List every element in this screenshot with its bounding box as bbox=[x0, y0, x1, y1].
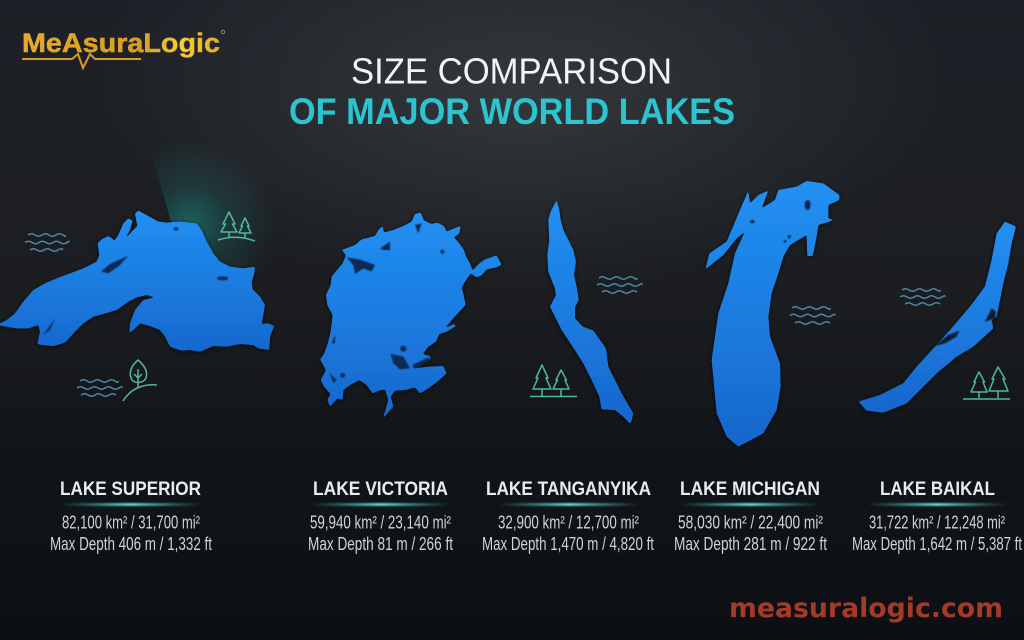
label: Lake Victoria: LAKE VICTORIA bbox=[313, 479, 448, 500]
label: Lake Victoria: 59,940 km² / 23,140 mi² bbox=[310, 512, 451, 532]
logo bbox=[22, 28, 225, 68]
icon: waves near Michigan bbox=[790, 307, 835, 324]
label: Lake Superior: 82,100 km² / 31,700 mi² bbox=[62, 512, 200, 532]
label: Lake Superior: Max Depth 406 m / 1,332 ft bbox=[50, 534, 212, 554]
label: Lake Tanganyika: 32,900 km² / 12,700 mi² bbox=[498, 512, 639, 532]
glow behind Lake Superior bbox=[150, 130, 290, 310]
label: Lake Tanganyika: Max Depth 1,470 m / 4,820 ft bbox=[482, 534, 654, 554]
label: Lake Tanganyika: LAKE TANGANYIKA bbox=[486, 479, 651, 500]
lake: Superior bbox=[0, 211, 274, 352]
label: Lake Michigan: Max Depth 281 m / 922 ft bbox=[674, 534, 827, 554]
label: Lake Victoria bbox=[308, 479, 453, 554]
lake: Baikal bbox=[858, 222, 1016, 413]
icon: waves below Superior bbox=[77, 380, 122, 396]
icon: waves near Superior bbox=[25, 234, 69, 251]
title: OF MAJOR WORLD LAKES bbox=[289, 90, 735, 132]
label: Lake Victoria: Max Depth 81 m / 266 ft bbox=[308, 534, 453, 554]
icon: trees near Baikal bbox=[963, 367, 1010, 399]
label: Lake Michigan: 58,030 km² / 22,400 mi² bbox=[678, 512, 823, 532]
label: Lake Michigan: LAKE MICHIGAN bbox=[680, 479, 820, 500]
lake: Tanganyika bbox=[547, 200, 633, 424]
title: SIZE COMPARISON bbox=[351, 50, 672, 92]
icon: waves near Tanganyika bbox=[597, 277, 642, 293]
logo: MeAsuraLogic bbox=[22, 28, 220, 58]
label: Lake Superior: LAKE SUPERIOR bbox=[60, 479, 201, 500]
icon: trees near Tanganyika bbox=[530, 365, 577, 396]
icon: waves near Baikal bbox=[900, 289, 945, 305]
title bbox=[289, 50, 735, 132]
lake: Michigan bbox=[705, 181, 839, 447]
label: Lake Baikal bbox=[852, 479, 1022, 554]
icon: leaf tree bbox=[123, 360, 157, 401]
label: Lake Baikal: LAKE BAIKAL bbox=[880, 479, 995, 500]
website url: measuralogic.com bbox=[729, 593, 1003, 624]
icon: trees near Superior bbox=[218, 212, 255, 241]
label: Lake Michigan bbox=[674, 479, 827, 554]
lake: Victoria bbox=[320, 213, 502, 419]
label: Lake Superior bbox=[50, 479, 212, 554]
label: Lake Tanganyika bbox=[482, 479, 654, 554]
